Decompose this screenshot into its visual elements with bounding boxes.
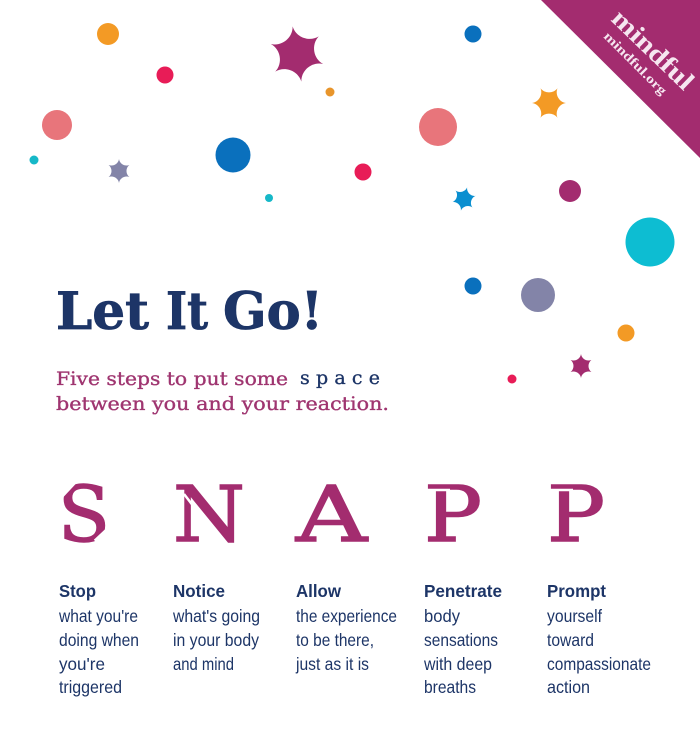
step: Penetrate: body xyxy=(424,606,460,626)
subtitle: between you and your reaction. xyxy=(56,393,389,415)
step: Prompt: compassionate xyxy=(547,654,651,674)
step: Allow: just as it is xyxy=(295,654,369,674)
subtitle: Five steps to put some xyxy=(56,368,288,390)
letter P: P xyxy=(547,471,605,560)
SNAPP stencil letters xyxy=(58,471,605,560)
step: Notice: Notice xyxy=(173,581,225,601)
step: Stop: Stop xyxy=(59,581,96,601)
step: Stop: doing when xyxy=(59,630,139,650)
decorative confetti circles xyxy=(30,23,674,384)
letter S: S xyxy=(58,471,110,560)
step: Penetrate: breaths xyxy=(424,677,476,697)
step: Notice: in your body xyxy=(173,630,259,650)
step: Penetrate: with deep xyxy=(423,654,492,674)
step: Stop xyxy=(58,581,139,697)
step: Penetrate xyxy=(423,581,502,697)
step: Allow: the experience xyxy=(296,606,397,626)
title: Let xyxy=(56,282,149,342)
title xyxy=(56,282,323,342)
step: Prompt: yourself xyxy=(547,606,602,626)
title: It xyxy=(166,282,208,342)
step: Allow: Allow xyxy=(296,581,341,601)
step: Prompt: action xyxy=(547,677,590,697)
step: Penetrate: sensations xyxy=(424,630,498,650)
step: Prompt: toward xyxy=(547,630,594,650)
title: Go! xyxy=(223,282,323,342)
letter N: N xyxy=(173,471,245,560)
banner: mindful corner ribbon xyxy=(541,0,700,158)
step: Prompt: Prompt xyxy=(547,581,606,601)
step: Notice: and mind xyxy=(173,654,234,674)
brand url: mindful.org: mindful.org xyxy=(601,29,671,98)
step: Penetrate: Penetrate xyxy=(424,581,502,601)
step: Notice: what's going xyxy=(172,606,260,626)
step: Prompt xyxy=(547,581,651,697)
step: Stop: you're xyxy=(59,654,105,674)
letter P: P xyxy=(424,471,482,560)
step: Notice xyxy=(172,581,260,674)
step: Stop: what you're xyxy=(58,606,138,626)
brand name: mindful: mindful xyxy=(606,3,700,96)
step: Allow: to be there, xyxy=(296,630,374,650)
subtitle: space xyxy=(300,367,380,389)
step: Allow xyxy=(295,581,397,674)
step: Stop: triggered xyxy=(59,677,122,697)
decorative confetti stars xyxy=(109,23,591,378)
letter A: A xyxy=(295,471,369,560)
subtitle xyxy=(56,367,389,415)
